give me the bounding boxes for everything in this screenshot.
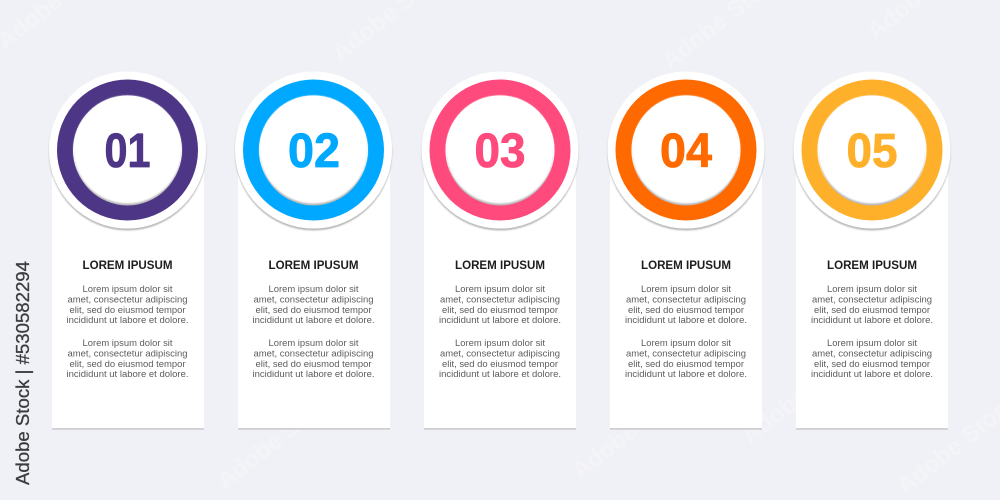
watermark: Adobe Stock <box>567 373 700 485</box>
number 2: 02 <box>288 125 340 178</box>
text block 1: amet, consectetur adipiscing <box>68 294 188 304</box>
text block 4: incididunt ut labore et dolore. <box>625 369 747 379</box>
number 4: 04 <box>660 125 712 178</box>
text block 2: Lorem ipsum dolor sit <box>268 338 359 348</box>
text block 1: incididunt ut labore et dolore. <box>66 315 188 325</box>
text block 1: Lorem ipsum dolor sit <box>82 338 173 348</box>
number 5: 05 <box>846 125 898 178</box>
text block 4 <box>625 284 747 379</box>
badge 4 <box>608 72 764 228</box>
text block 2: elit, sed do eiusmod tempor <box>256 305 372 315</box>
heading 3: LOREM IPUSUM <box>455 260 545 272</box>
column 4 <box>608 72 764 430</box>
text block 5: Lorem ipsum dolor sit <box>827 338 918 348</box>
column 3 <box>422 72 578 430</box>
text block 2: amet, consectetur adipiscing <box>254 294 374 304</box>
card 3 <box>424 150 576 430</box>
text block 1: incididunt ut labore et dolore. <box>66 369 188 379</box>
text block 3: elit, sed do eiusmod tempor <box>442 305 558 315</box>
text block 1 <box>66 284 188 379</box>
column 5 <box>794 72 950 430</box>
card 5 <box>796 150 948 430</box>
text block 5: elit, sed do eiusmod tempor <box>814 359 930 369</box>
text block 3 <box>439 284 561 379</box>
text block 4: amet, consectetur adipiscing <box>626 294 746 304</box>
badge 3 <box>422 72 578 228</box>
badge 5 <box>794 72 950 228</box>
text block 3: elit, sed do eiusmod tempor <box>442 359 558 369</box>
text block 3: incididunt ut labore et dolore. <box>439 315 561 325</box>
text block 4: Lorem ipsum dolor sit <box>641 284 732 294</box>
text block 2: incididunt ut labore et dolore. <box>252 315 374 325</box>
text block 4: Lorem ipsum dolor sit <box>641 338 732 348</box>
text block 4: elit, sed do eiusmod tempor <box>628 305 744 315</box>
text block 2: amet, consectetur adipiscing <box>254 348 374 358</box>
column 2 <box>235 72 392 430</box>
text block 2: Lorem ipsum dolor sit <box>268 284 359 294</box>
text block 5: amet, consectetur adipiscing <box>812 294 932 304</box>
text block 5: elit, sed do eiusmod tempor <box>814 305 930 315</box>
side stock label: Adobe Stock | #530582294 <box>13 261 33 485</box>
text block 3: amet, consectetur adipiscing <box>440 294 560 304</box>
text block 3: incididunt ut labore et dolore. <box>439 369 561 379</box>
text block 4: amet, consectetur adipiscing <box>626 348 746 358</box>
watermark: Adobe Stock <box>212 383 345 495</box>
text block 2 <box>252 284 374 379</box>
card 4 <box>610 150 762 430</box>
card 2 <box>238 150 390 430</box>
text block 1: elit, sed do eiusmod tempor <box>70 305 186 315</box>
heading 1: LOREM IPUSUM <box>82 260 172 272</box>
text block 1: amet, consectetur adipiscing <box>68 348 188 358</box>
text block 3: Lorem ipsum dolor sit <box>455 284 546 294</box>
text block 1: elit, sed do eiusmod tempor <box>70 359 186 369</box>
number 3: 03 <box>474 125 526 178</box>
text block 3: amet, consectetur adipiscing <box>440 348 560 358</box>
badge 2 <box>235 72 392 228</box>
text block 4: incididunt ut labore et dolore. <box>625 315 747 325</box>
watermark: Adobe Stock <box>737 338 870 450</box>
heading 5: LOREM IPUSUM <box>827 260 917 272</box>
card 1 <box>52 150 204 430</box>
heading 2: LOREM IPUSUM <box>268 260 358 272</box>
text block 5 <box>811 284 933 379</box>
text block 2: incididunt ut labore et dolore. <box>252 369 374 379</box>
heading 4: LOREM IPUSUM <box>641 260 731 272</box>
column 1 <box>49 72 206 430</box>
badge 1 <box>49 72 206 228</box>
text block 5: incididunt ut labore et dolore. <box>811 315 933 325</box>
text block 5: incididunt ut labore et dolore. <box>811 369 933 379</box>
number 1: 01 <box>104 125 150 178</box>
text block 1: Lorem ipsum dolor sit <box>82 284 173 294</box>
text block 5: Lorem ipsum dolor sit <box>827 284 918 294</box>
text block 4: elit, sed do eiusmod tempor <box>628 359 744 369</box>
text block 2: elit, sed do eiusmod tempor <box>256 359 372 369</box>
text block 3: Lorem ipsum dolor sit <box>455 338 546 348</box>
text block 5: amet, consectetur adipiscing <box>812 348 932 358</box>
